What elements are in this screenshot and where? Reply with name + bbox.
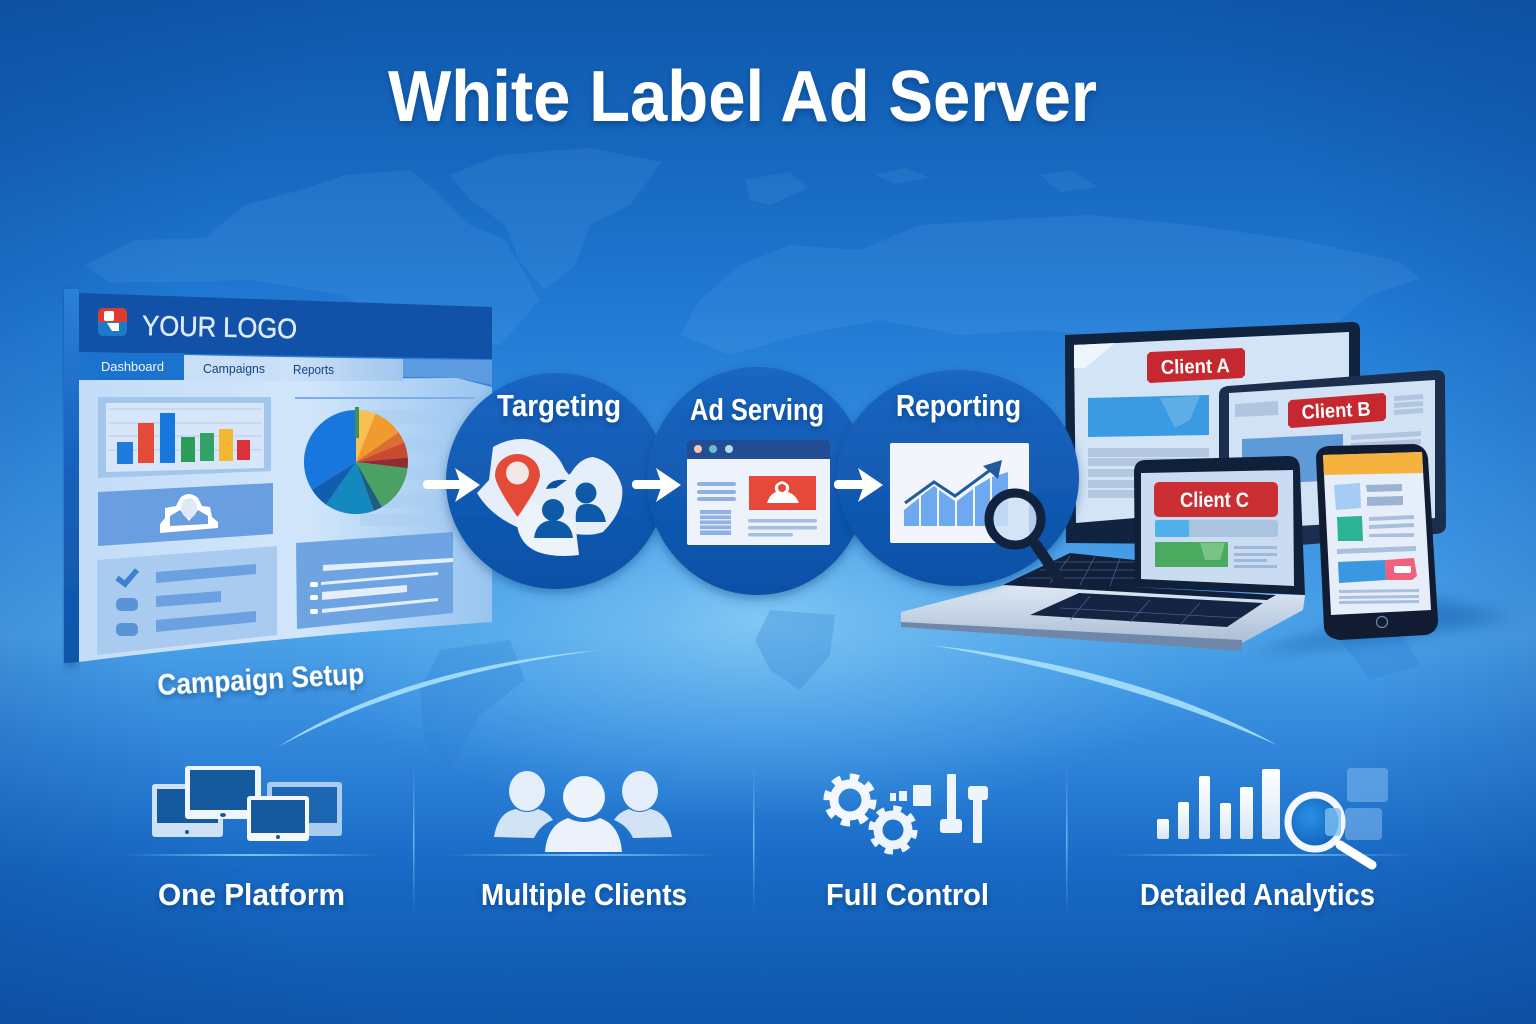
ad serving heading: Ad Serving <box>690 392 824 427</box>
feature: detailed analytics <box>1113 768 1413 912</box>
icon: devices <box>152 766 342 841</box>
icon: reporting chart and magnifier <box>890 443 1058 577</box>
badge: Client B <box>1288 393 1386 428</box>
step: targeting circle <box>446 373 666 589</box>
arc right <box>930 645 1277 745</box>
arrow: setup to targeting <box>423 468 480 502</box>
table stripes behind pie <box>295 397 475 526</box>
dashboard tabs <box>79 353 492 385</box>
step: reporting circle <box>837 370 1079 586</box>
world map backdrop <box>85 148 1420 355</box>
badge: Client B: Client B <box>1301 398 1371 424</box>
checklist block <box>97 546 277 655</box>
dashboard tabs: Campaigns <box>203 361 265 376</box>
badge: Client C: Client C <box>1180 489 1249 512</box>
banner block with icon <box>98 483 273 546</box>
dashboard header: YOUR LOGO <box>142 310 297 344</box>
laptop lid <box>1134 456 1305 595</box>
arrow: ad serving to reporting <box>834 468 883 502</box>
laptop base <box>901 553 1305 651</box>
title: White Label Ad Server <box>388 57 1097 137</box>
bar chart <box>98 397 271 478</box>
label: full control: Full Control <box>826 877 989 912</box>
targeting heading: Targeting <box>497 388 621 423</box>
label: campaign setup: Campaign Setup <box>157 657 365 702</box>
icon: gears and sliders <box>827 774 988 851</box>
panel: campaign setup dashboard <box>64 289 492 663</box>
badge: Client A <box>1147 348 1245 383</box>
device shadow <box>1250 600 1515 655</box>
arrow: targeting to ad serving <box>632 468 681 502</box>
badge: Client A: Client A <box>1161 355 1230 379</box>
feature: multiple clients <box>447 771 717 912</box>
label: detailed analytics: Detailed Analytics <box>1140 877 1375 912</box>
devices group <box>901 322 1515 655</box>
reporting heading: Reporting <box>896 388 1021 423</box>
label: one platform: One Platform <box>158 877 345 912</box>
dashboard tabs: Dashboard <box>101 359 164 374</box>
dashboard tabs: Reports <box>293 362 334 377</box>
step: ad serving circle <box>647 367 867 595</box>
device: laptop client C <box>901 456 1305 651</box>
device: tablet client B <box>1219 370 1446 545</box>
icon: ad window <box>687 440 830 545</box>
badge: Client C <box>1154 482 1278 517</box>
settings block <box>296 532 453 629</box>
pie chart <box>304 407 408 514</box>
icon: analytics bars and magnifier <box>1157 768 1388 865</box>
device: monitor client A <box>1065 322 1360 545</box>
dashboard header <box>79 293 492 359</box>
icon: targeting map pin and users <box>477 439 622 556</box>
feature: full control <box>826 774 989 912</box>
feature: one platform <box>125 766 380 912</box>
lower map landmasses <box>420 610 1420 770</box>
label: multiple clients: Multiple Clients <box>481 877 687 912</box>
icon: three users <box>494 771 672 852</box>
device: phone <box>1316 444 1438 640</box>
arc left <box>278 650 600 747</box>
